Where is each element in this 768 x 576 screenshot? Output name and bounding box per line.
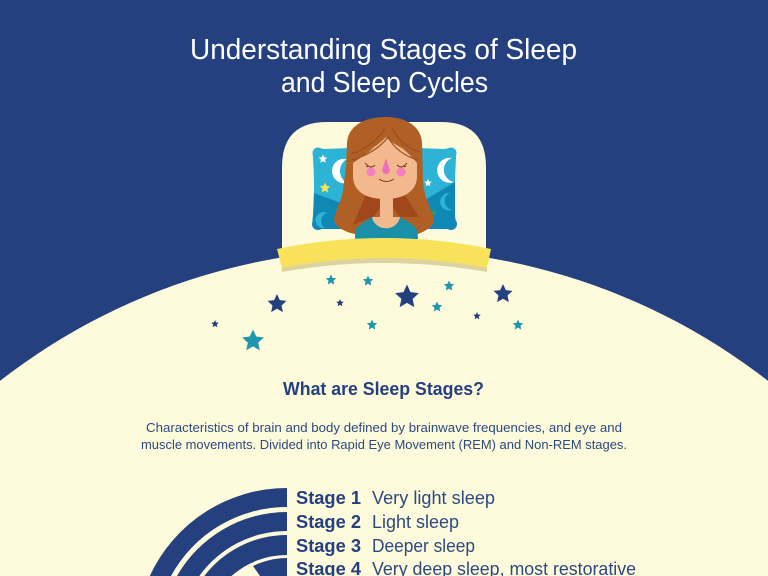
hill xyxy=(0,249,768,576)
title: and Sleep Cycles xyxy=(281,67,488,99)
heading: what are sleep stages: What are Sleep Stages? xyxy=(283,378,484,399)
stage 2 row xyxy=(296,512,459,532)
body xyxy=(355,217,418,239)
teal stars xyxy=(242,274,523,350)
stage 2 row: Light sleep xyxy=(372,512,459,532)
stage 2 row: Stage 2 xyxy=(296,512,361,532)
headboard xyxy=(282,122,486,262)
arc: stage 1 xyxy=(150,488,287,576)
stage 1 row: Stage 1 xyxy=(296,488,361,508)
illustration: sleeping girl in bed xyxy=(282,117,486,262)
stage list xyxy=(296,488,636,576)
hair xyxy=(334,117,434,234)
arc: stage 4 xyxy=(253,558,287,576)
description text: Characteristics of brain and body defined by brainwave frequencies, and eye and xyxy=(146,421,622,435)
inner hair shadow xyxy=(353,192,419,225)
stage 3 row: Deeper sleep xyxy=(372,536,475,556)
pillow xyxy=(312,148,457,230)
nose xyxy=(382,158,390,174)
smile xyxy=(379,179,394,182)
description text xyxy=(141,421,627,452)
cheeks xyxy=(366,168,376,176)
navy stars xyxy=(211,284,513,327)
fringe xyxy=(351,128,420,160)
moons on pillow xyxy=(332,159,347,183)
title xyxy=(190,34,577,99)
blanket xyxy=(277,238,491,272)
pillow stars xyxy=(319,154,327,163)
stage 3 row: Stage 3 xyxy=(296,536,361,556)
eyes xyxy=(365,163,407,167)
neck xyxy=(380,195,393,219)
arc: stage 3 xyxy=(204,535,287,576)
stage 1 row xyxy=(296,488,495,508)
neckline xyxy=(372,217,400,228)
arc: stage 2 xyxy=(177,512,287,576)
concentric stage arcs xyxy=(150,488,287,576)
scattered stars xyxy=(211,274,523,350)
stage 1 row: Very light sleep xyxy=(372,488,495,508)
description text: muscle movements. Divided into Rapid Eye Movement (REM) and Non-REM stages. xyxy=(141,438,627,452)
stage 3 row xyxy=(296,536,475,556)
title: Understanding Stages of Sleep xyxy=(190,34,577,66)
face xyxy=(353,137,417,199)
